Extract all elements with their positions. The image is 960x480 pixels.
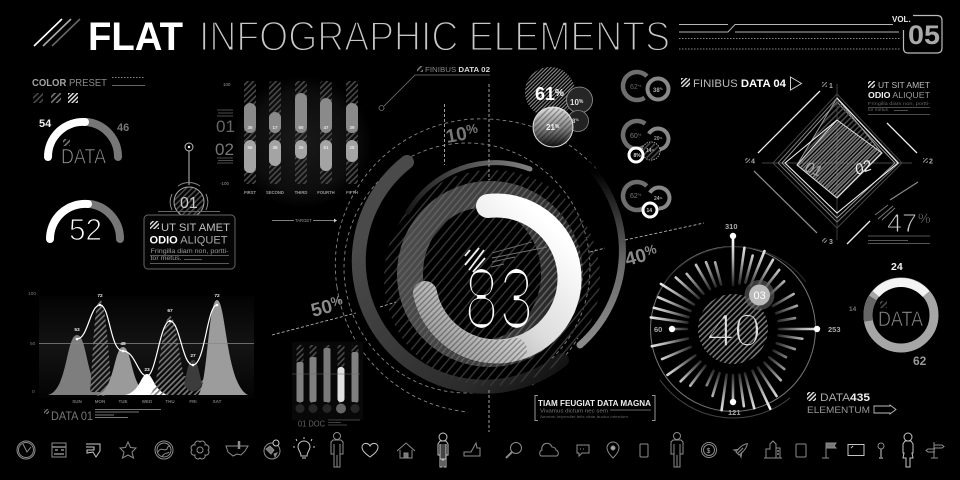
bubble labels: 21: [546, 123, 555, 132]
hatch: [807, 392, 816, 401]
text block: UT SIT AMET: Fringilla diam non, portti-: [868, 101, 930, 107]
donut 60%: 60: [630, 133, 638, 140]
day labels: MON: [95, 399, 105, 404]
donut 20%: [644, 125, 672, 153]
bubble labels: 10: [570, 98, 579, 107]
bubble labels: [535, 84, 584, 132]
label text: FINIBUS DATA 02: [425, 65, 490, 74]
tick labels: [654, 222, 841, 417]
icon: flag: [822, 443, 836, 458]
heading hatch: [681, 78, 690, 87]
icon: tablet: [796, 444, 806, 457]
grid line: [292, 373, 360, 375]
donut 20%: %: [660, 136, 663, 140]
stat value: 47: [887, 208, 917, 238]
value labels: 72: [97, 293, 103, 299]
y axis labels: 50: [30, 341, 36, 347]
upper bars: [244, 93, 358, 133]
progress arc hatching: [425, 293, 515, 352]
bubble labels: %: [555, 88, 564, 99]
icon: dollar coin: [702, 442, 716, 458]
icon: phone: [640, 444, 648, 457]
top thin arc: [408, 163, 530, 212]
bubble labels: 8: [572, 119, 575, 125]
icon: map pin: [226, 441, 248, 456]
label: DATA435 ELEMENTUM: [807, 392, 896, 416]
text block: UT SIT AMET: UT SIT AMET: [878, 80, 930, 90]
callout: 01: [144, 143, 235, 269]
donut 38%: %: [660, 87, 664, 91]
callout text: tor metus.: [150, 255, 182, 262]
chart backdrop: [292, 342, 363, 420]
radar series labels: 01: [803, 159, 824, 180]
radial bars: [651, 236, 818, 410]
heading: FINIBUS DATA 04: [681, 77, 802, 90]
callout pointer: [185, 143, 193, 185]
donut 14% white: 14: [646, 208, 652, 214]
icon: light bulb: [293, 437, 315, 458]
icon: earth: [264, 440, 280, 459]
bubble 21%: [533, 107, 573, 147]
bar values: 56: [247, 145, 253, 150]
area THU: [150, 316, 192, 395]
category labels: [244, 190, 358, 195]
value labels: 27: [190, 353, 196, 359]
caption brackets: [535, 396, 655, 420]
area FRI: [184, 360, 202, 392]
category labels: FIFTH: [346, 190, 358, 195]
day labels: SAT: [213, 399, 222, 404]
bubble 8%: [568, 110, 588, 132]
bubble labels: 61: [535, 84, 555, 104]
donut label: DATA: [878, 308, 923, 331]
donut 14%: 14: [646, 148, 652, 154]
center value 40: 40: [707, 304, 761, 356]
index circles: [296, 404, 360, 414]
radar axis labels: 3: [829, 239, 833, 246]
donut 8%: 8%: [634, 153, 641, 159]
badge 03: 03: [754, 290, 766, 302]
area SUN: [48, 335, 106, 395]
value labels: 67: [167, 308, 173, 314]
day labels: THU: [165, 399, 175, 404]
bubble labels: %: [579, 99, 584, 105]
heading arrow: [790, 77, 802, 90]
callout text: UT SIT AMET: [161, 222, 230, 234]
category labels: FIRST: [244, 190, 256, 195]
donut 14%: [642, 142, 660, 160]
bar fills: [296, 348, 358, 402]
center hatch mark: [465, 248, 485, 272]
icon: star: [120, 442, 136, 458]
radar outer diagonals: [754, 91, 918, 244]
text block: UT SIT AMET: tor metus.: [868, 107, 889, 113]
stat hatch: [875, 205, 895, 220]
label: DATA435 ELEMENTUM: ELEMENTUM: [807, 405, 870, 416]
icon: buildings: [764, 441, 782, 458]
value labels: 48: [120, 341, 126, 347]
icon: rocket: [734, 440, 751, 457]
donut 38%: [648, 78, 668, 100]
hatched background disc: [384, 170, 600, 386]
donut 60%: %: [638, 132, 642, 137]
panel: color preset: [32, 77, 145, 103]
donut value 24: 24: [891, 261, 903, 273]
icon: hand pointer: [86, 444, 100, 457]
series label 02: 02: [215, 140, 234, 159]
gauge value 46: 46: [117, 122, 129, 134]
bar chart: 01 02: [215, 76, 372, 223]
area chart: DATA 01: [28, 291, 254, 423]
color preset heading: COLOR PRESET: [32, 77, 108, 89]
value labels: 23: [144, 367, 150, 373]
value labels: 53: [74, 327, 80, 333]
volume number: 05: [908, 20, 940, 50]
header rule lines: [679, 24, 900, 49]
bar values: 39: [349, 125, 355, 130]
icon: laptop: [848, 444, 864, 456]
badge 03: [744, 280, 774, 310]
tick labels: 121: [728, 408, 741, 417]
gauge hatch mark: [63, 139, 70, 146]
gauge arcs: [48, 122, 118, 157]
50 grid line: [39, 342, 254, 344]
icon: woman: [438, 433, 448, 467]
bubble 10%: [566, 87, 592, 113]
stat rule lines: [868, 236, 930, 244]
label 40%: 40: [623, 245, 649, 271]
small donut group 3: [618, 177, 673, 217]
grey hatched ring: [397, 181, 583, 367]
chart caption: DATA 01: [51, 409, 93, 423]
icon: house: [397, 443, 415, 458]
stat: 47%: [868, 205, 930, 244]
chart backdrop: [232, 76, 372, 208]
icon: magnifier: [506, 442, 522, 458]
icon: chat: [577, 445, 589, 456]
title word: FLAT: FLAT: [88, 15, 183, 59]
bar values: 35: [247, 125, 253, 130]
donut 62%: %: [638, 83, 642, 88]
target arrow: TARGET: [295, 218, 312, 223]
area MON hatch: [90, 300, 112, 396]
donut 62%: %: [638, 192, 642, 197]
title: [34, 12, 670, 60]
dark outer arc: [359, 162, 562, 387]
chart caption: [44, 409, 161, 423]
donut 62%: [618, 67, 656, 105]
icon: shop: [52, 443, 66, 457]
caption text: TIAM FEUGIAT DATA MAGNA: [538, 399, 651, 408]
end dots: [669, 233, 820, 405]
callout text: ODIO ALIQUET: [150, 234, 228, 246]
bar values: 51: [323, 145, 329, 150]
radar diamonds: [773, 94, 902, 228]
bar tracks: [296, 345, 358, 403]
data label: FINIBUS DATA 02: [379, 65, 490, 110]
bar values: 28: [349, 145, 355, 150]
donut 24%: %: [660, 196, 663, 200]
donut ring: [868, 282, 934, 348]
icon: globe: [155, 441, 173, 459]
icon: direction post: [926, 442, 944, 458]
radar axis labels: [745, 82, 933, 246]
bubble labels: %: [555, 124, 560, 130]
icon: heart: [362, 443, 378, 457]
icon: man: [331, 432, 343, 467]
hatched center disc: [698, 294, 768, 364]
donut hatch: [880, 301, 887, 308]
bubble labels: %: [575, 117, 579, 122]
center mini lines: [491, 242, 547, 267]
radar series labels: [803, 157, 875, 180]
radar series 01: [797, 98, 882, 198]
donut 24%: 24: [654, 196, 660, 202]
day labels: SUN: [72, 399, 82, 404]
radar axes: [762, 84, 912, 240]
callout badge 01: 01: [180, 195, 198, 212]
value labels: [74, 293, 220, 373]
target arrow: [272, 218, 337, 223]
text block: UT SIT AMET: [868, 80, 930, 114]
day labels: TUE: [118, 399, 128, 404]
caption: TIAM FEUGIAT: Aenean imperdiet felis vitae auctor interdum: [540, 415, 628, 419]
category labels: SECOND: [266, 190, 284, 195]
donut 24%: [645, 184, 673, 212]
icon: thumb: [464, 443, 480, 456]
bar values: 47: [323, 125, 329, 130]
donut chart: DATA: [849, 261, 934, 368]
donut 60%: [618, 116, 656, 154]
radar axis labels: 2: [929, 158, 933, 166]
trend points: [76, 304, 218, 377]
donut value 14: 14: [849, 306, 857, 313]
donut value 62: 62: [913, 354, 927, 368]
grey right arc: [580, 165, 622, 345]
volume box: [904, 16, 942, 53]
gauge: 52: [50, 204, 120, 247]
chart axis labels: 100: [223, 82, 231, 87]
donut 20%: 20: [654, 136, 660, 142]
y axis labels: 100: [28, 291, 36, 297]
donut 62%: [618, 177, 656, 215]
y axis labels: [28, 291, 36, 395]
radar axis labels: 1: [829, 83, 833, 90]
hatched skirts: [70, 375, 240, 395]
callout text: Fringilla diam non, portti-: [150, 248, 228, 255]
caption: TIAM FEUGIAT: [535, 396, 655, 420]
volume label: VOL.: [892, 15, 911, 24]
day labels: WED: [142, 399, 153, 404]
icon: woman: [903, 433, 913, 467]
small donut group 2: [618, 116, 672, 162]
bubble 61%: [525, 67, 575, 117]
radar white outline: [785, 98, 898, 213]
y axis labels: 0: [32, 389, 35, 395]
dashed spokes: [272, 84, 704, 432]
bar tracks: [244, 81, 358, 184]
icon: clock: [17, 441, 35, 459]
arrow: [874, 405, 896, 414]
center value: 83: [464, 251, 534, 347]
area WED: [125, 374, 169, 395]
radar series labels: 02: [853, 157, 875, 179]
heading text: FINIBUS DATA 04: [693, 78, 787, 90]
donut 62%: 62: [630, 84, 638, 91]
category labels: FOURTH: [317, 190, 335, 195]
bar values: 26: [298, 145, 304, 150]
label text: DATA435: [820, 392, 870, 404]
leader line: [379, 75, 490, 110]
radar series 02: [797, 120, 882, 198]
chart backdrop: [39, 296, 254, 398]
tick labels: 60: [654, 325, 662, 334]
bar values: 60: [298, 125, 304, 130]
area SAT: [198, 300, 248, 395]
donut 62%: 62: [630, 193, 638, 200]
icon: cloud: [540, 443, 558, 456]
bar values: 38: [272, 145, 278, 150]
color swatches: [33, 93, 78, 103]
central donut chart: 83: [272, 84, 704, 432]
icon: gear: [191, 441, 209, 459]
chart caption: 01 DOC: [298, 418, 325, 428]
trend line: [77, 305, 217, 376]
radial burst chart: 40: [650, 222, 841, 418]
label 10%: %: [465, 121, 479, 137]
bubble chart: [525, 67, 592, 147]
series label 01: 01: [216, 117, 235, 136]
donut 14%: %: [652, 148, 655, 152]
bar values: 17: [272, 125, 278, 130]
icon: signpost pin: [878, 443, 884, 458]
gauge value 54: 54: [39, 118, 52, 130]
tick labels: 253: [828, 325, 841, 334]
dashed rings: [335, 119, 597, 412]
chart axis labels: -100: [220, 181, 230, 186]
icon: man: [671, 432, 683, 467]
tick labels: 310: [725, 222, 738, 231]
text block: UT SIT AMET: ODIO ALIQUET: [868, 90, 930, 100]
bar chart: 01 DOC: [292, 342, 363, 428]
donut 38%: 38: [653, 88, 660, 94]
outer ring: [650, 246, 816, 418]
label 10%: 10: [444, 124, 469, 148]
area MON: [90, 300, 112, 392]
white progress arc: [425, 205, 570, 351]
lower bars: [244, 140, 358, 173]
volume badge: [892, 15, 942, 53]
icon: location star: [607, 442, 619, 458]
area TUE: [98, 347, 148, 395]
icon row: [17, 432, 944, 467]
chart axis labels: [220, 82, 231, 186]
gauge: 54 / 46 DATA: [39, 118, 129, 168]
day labels: [72, 399, 222, 404]
day labels: FRI: [189, 399, 197, 404]
radar chart: [745, 82, 933, 246]
icon: dollar coin: $: [706, 448, 710, 455]
value labels: 72: [214, 293, 220, 299]
callout box: [144, 215, 235, 269]
stat percent: %: [918, 210, 930, 226]
callout text: [150, 221, 230, 264]
bar values: [247, 125, 355, 150]
label 40%: %: [643, 241, 658, 259]
title words: INFOGRAPHIC ELEMENTS: INFOGRAPHIC ELEMENTS: [199, 12, 670, 60]
caption: TIAM FEUGIAT: Vivamus dictum nec sem: [540, 408, 608, 414]
icon: title hatch: [34, 19, 80, 46]
small donut group 1: [618, 67, 668, 105]
gauge arcs: [50, 204, 120, 239]
gauge value 52: 52: [69, 212, 102, 247]
label 50%: 50: [309, 296, 335, 322]
radar axis labels: 4: [751, 158, 755, 166]
label 50%: %: [329, 292, 344, 310]
category labels: THIRD: [295, 190, 307, 195]
gauge label: DATA: [61, 146, 106, 168]
